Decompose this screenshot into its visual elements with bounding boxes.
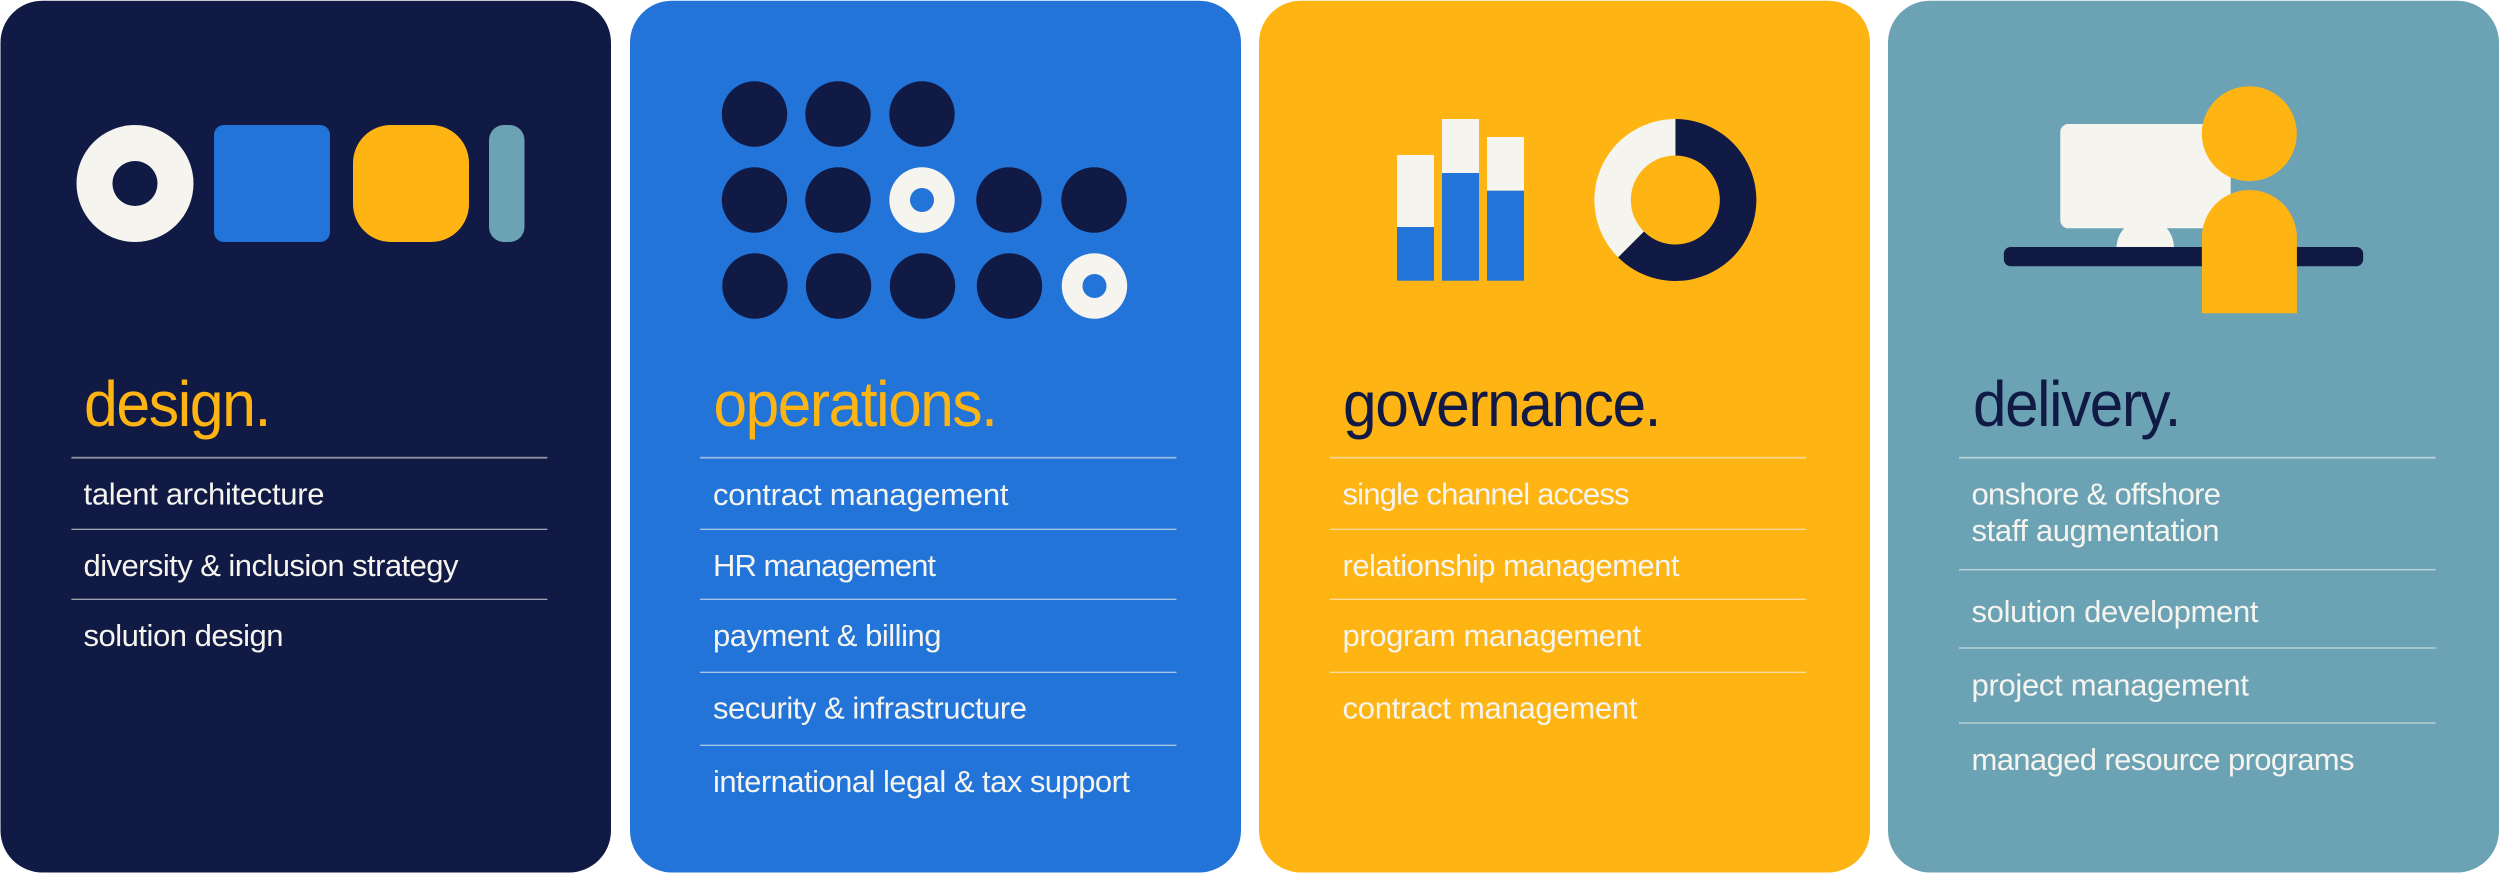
icon: stacked bar chart [1397, 119, 1524, 281]
item: diversity & inclusion strategy: diversity & inclusion strategy [84, 548, 459, 583]
item: managed resource programs: managed resource programs [1972, 742, 2354, 777]
panel: governance [1259, 1, 1870, 872]
icon: person at computer [2004, 86, 2363, 313]
icon: person body [2202, 190, 2297, 313]
item: HR management: HR management [713, 548, 936, 583]
panel background: operations [630, 1, 1241, 872]
item: security & infrastructure: security & infrastructure [713, 690, 1027, 726]
icon: ring dot, middle row [889, 167, 955, 233]
panel: design [0, 1, 611, 872]
icon: teal pill [489, 125, 524, 242]
item: onshore & offshore staff augmentation [1972, 476, 2221, 548]
icon: monitor screen [2060, 124, 2231, 228]
panel background: design [0, 1, 611, 872]
item: international legal & tax support: international legal & tax support [713, 764, 1130, 799]
icon: ring dot, bottom row [1062, 253, 1127, 319]
item: contract management: contract management [713, 477, 1009, 512]
heading: design: design. [84, 368, 270, 440]
item: project management: project management [1972, 668, 2249, 702]
icon: donut chart [1594, 119, 1756, 281]
icon: blue square [214, 125, 330, 242]
icon: dot grid [722, 81, 1127, 319]
heading: delivery: delivery. [1973, 368, 2180, 440]
icon: monitor stand [2116, 228, 2174, 247]
item: talent architecture: talent architecture [84, 476, 324, 512]
item: payment & billing: payment & billing [713, 618, 942, 653]
panel: operations [630, 1, 1241, 872]
list: design services [71, 457, 547, 653]
icon: desk [2004, 247, 2363, 266]
item: relationship management: relationship management [1342, 548, 1680, 583]
icon: person head [2202, 86, 2297, 181]
item: solution design: solution design [84, 618, 284, 653]
panel background: governance [1259, 1, 1870, 872]
panel background: delivery [1888, 1, 2499, 872]
icon: ring [77, 125, 194, 242]
icon: geometric shapes [77, 125, 525, 242]
item: program management: program management [1342, 618, 1641, 653]
heading: operations: operations. [714, 368, 996, 440]
item: onshore & offshore staff augmentation: staff augmentation [1972, 513, 2220, 548]
heading: governance: governance. [1343, 368, 1660, 440]
list: operations services [700, 457, 1176, 799]
item: contract management: contract management [1342, 690, 1638, 726]
icon: yellow rounded square [353, 125, 469, 242]
list: governance services [1330, 457, 1806, 726]
list: delivery services [1959, 457, 2436, 777]
item: onshore & offshore staff augmentation: onshore & offshore [1972, 476, 2221, 512]
item: single channel access: single channel access [1342, 476, 1630, 512]
item: solution development: solution development [1972, 594, 2259, 629]
panel: delivery [1888, 1, 2499, 872]
